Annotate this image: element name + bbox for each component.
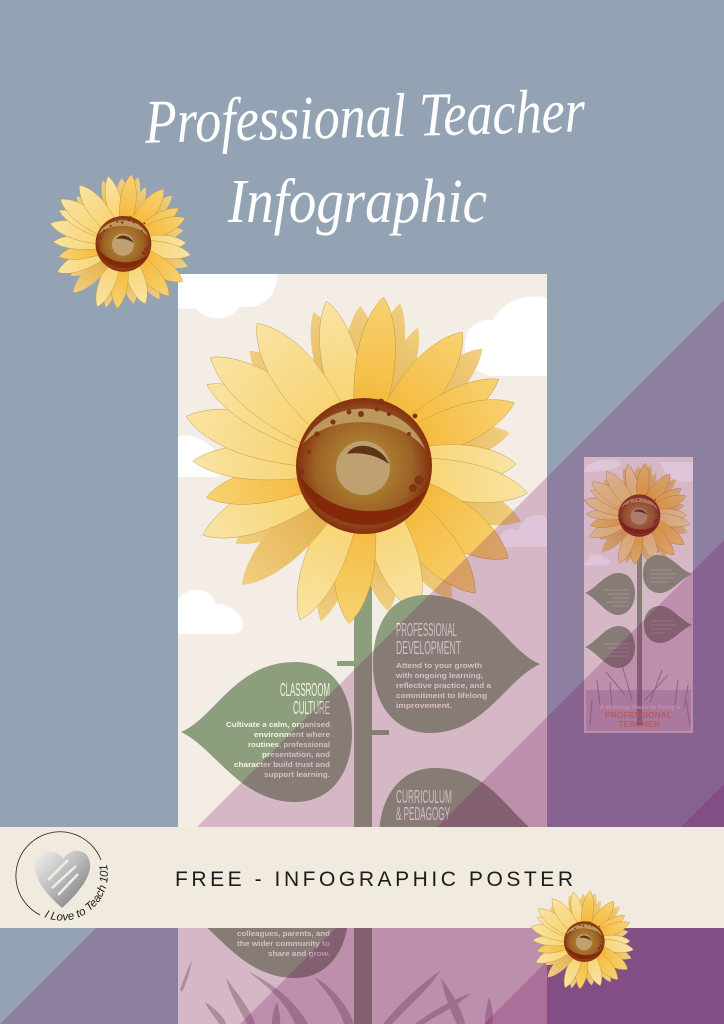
banner [0, 827, 724, 928]
grass [180, 960, 493, 1024]
leaf: curriculum and pedagogy: & PEDAGOGY [396, 804, 450, 824]
stem [337, 515, 389, 1024]
title [143, 77, 586, 236]
leaf: professional development: commitment to lifelong [396, 691, 487, 700]
small poster title [600, 705, 680, 729]
diagonal purple overlays [0, 300, 724, 1024]
sunflower: large [181, 295, 531, 627]
leaf: professional development: reflective practice, and a [396, 681, 492, 690]
leaf: classroom culture: routines, professional [248, 740, 330, 749]
leaf: professional development: with ongoing learning, [395, 671, 483, 680]
leaf: classroom culture [181, 662, 352, 802]
leaf: professional development: Attend to your growth [396, 661, 482, 670]
logo [16, 831, 108, 921]
leaf: professional development: improvement. [396, 701, 452, 710]
leaf: community: the wider community to [237, 939, 330, 948]
leaf: classroom culture: CULTURE [293, 698, 330, 718]
leaf: professional development: DEVELOPMENT [396, 638, 461, 658]
banner text: FREE - INFOGRAPHIC POSTER [175, 868, 573, 891]
leaf: curriculum and pedagogy: CURRICULUM [396, 787, 452, 807]
sunflower: top left [48, 174, 192, 310]
logo heart [35, 851, 90, 908]
leaf: professional development [373, 595, 540, 733]
stem [637, 540, 642, 725]
leaf: classroom culture: support learning. [264, 770, 330, 779]
leaf: classroom culture: CLASSROOM [280, 680, 330, 700]
small poster title: A Winning Steps to Being a [600, 705, 680, 711]
leaf: curriculum and pedagogy [379, 768, 546, 907]
leaf: classroom culture: Cultivate a calm, organised [226, 720, 330, 729]
panel: main poster [178, 274, 547, 1024]
grass [590, 665, 690, 725]
clouds [584, 460, 693, 566]
small leaves [585, 555, 692, 668]
small poster title: TEACHER [618, 720, 660, 729]
leaf: professional development: PROFESSIONAL [396, 620, 457, 640]
leaf: community [181, 838, 349, 978]
logo: I Love to Teach 101 [44, 865, 108, 921]
leaf: community: colleagues, parents, and [237, 929, 330, 938]
clouds [178, 274, 547, 634]
small leaf text lines [603, 570, 676, 656]
title: Professional Teacher [143, 77, 586, 157]
leaf: community: share and grow. [268, 949, 330, 958]
leaf: classroom culture: presentation, and [262, 750, 330, 759]
leaf: classroom culture: character build trust and [234, 760, 330, 769]
sunflower: small poster [582, 463, 691, 566]
title: Infographic [227, 168, 487, 236]
leaf: classroom culture: environment where [254, 730, 330, 739]
sunflower: bottom right [529, 890, 634, 990]
small poster title: PROFESSIONAL [605, 711, 672, 720]
panel: small poster preview [582, 457, 693, 733]
